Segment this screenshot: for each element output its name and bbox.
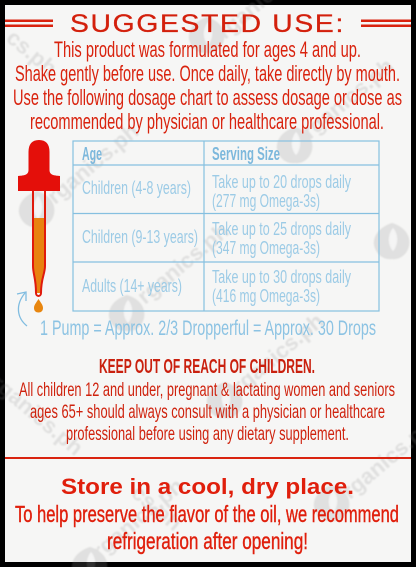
table rows: Take up to 30 drops daily: [212, 267, 351, 287]
watermarks: rganics.ph: [297, 53, 398, 144]
table rows: Adults (14+ years): [82, 276, 182, 296]
table rows: Take up to 20 drops daily: [212, 172, 351, 192]
heading rule right: [361, 20, 411, 27]
storage heading: Store in a cool, dry place.: [61, 474, 354, 499]
divider: [5, 457, 411, 459]
table rows: Take up to 25 drops daily: [212, 219, 351, 239]
watermarks: cs.ph: [127, 480, 187, 536]
table header: [82, 144, 280, 164]
table rows: [82, 172, 351, 306]
watermarks: cs.ph: [2, 25, 62, 81]
dosage table: [73, 141, 379, 311]
table rows: Children (4-8 years): [82, 178, 191, 198]
table header: Serving Size: [212, 144, 280, 164]
storage text: refrigeration after opening!: [107, 528, 308, 554]
table rows: (416 mg Omega-3s): [212, 286, 320, 306]
icon: curved arrow: [17, 292, 27, 326]
warning text: [19, 380, 395, 445]
table header: Age: [82, 144, 102, 164]
table rows: (277 mg Omega-3s): [212, 191, 320, 211]
storage text: [15, 501, 399, 554]
heading: SUGGESTED USE:: [70, 10, 345, 38]
icon: dropper: [18, 140, 60, 312]
watermarks: rganics.ph: [42, 118, 143, 209]
watermarks: rganics.ph: [87, 473, 188, 564]
table rows: (347 mg Omega-3s): [212, 238, 320, 258]
intro text: [13, 37, 402, 134]
heading rule left: [5, 20, 53, 27]
table rows: Children (9-13 years): [82, 227, 198, 247]
watermarks: rganics.ph: [132, 218, 233, 309]
watermarks: rganics.ph: [227, 308, 328, 399]
